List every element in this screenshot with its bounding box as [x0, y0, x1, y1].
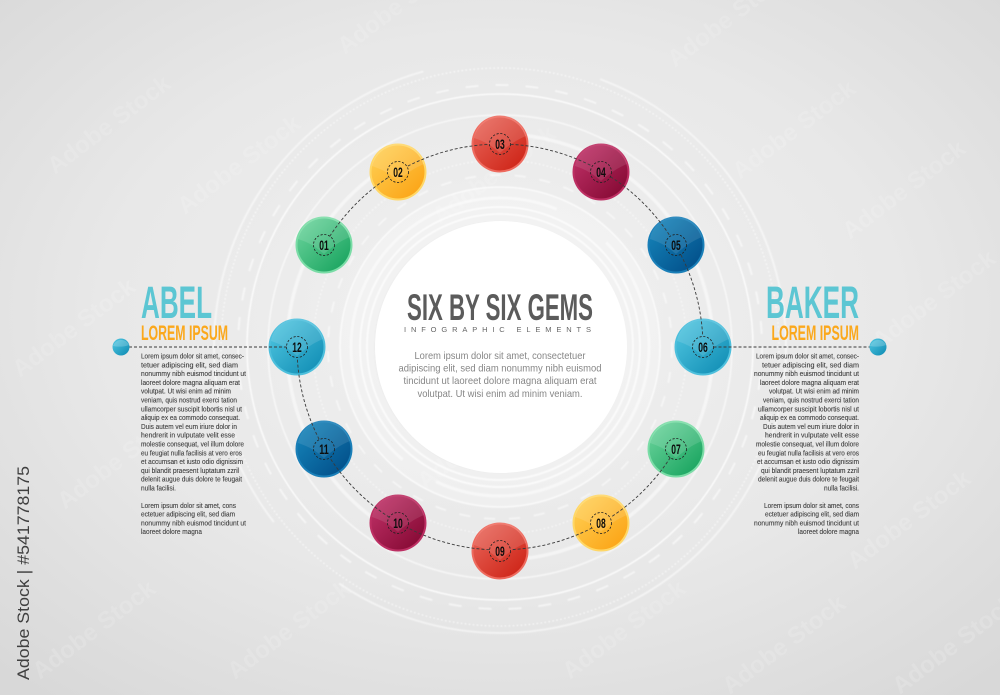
- gem 12 cyan: [268, 318, 326, 376]
- center paragraph: [398, 350, 602, 400]
- stock watermark: Adobe Stock: [27, 575, 161, 685]
- left body text: Lorem ipsum dolor sit amet, consec-: [141, 352, 244, 360]
- stock id side label: Adobe Stock | #541778175: [15, 466, 33, 680]
- stock watermark: Adobe Stock: [412, 385, 546, 495]
- right body text: aliquip ex ea commodo consequat.: [760, 413, 859, 422]
- right body text: nonummy nibh euismod tincidunt ut: [754, 518, 860, 527]
- gem 02 yellow: [370, 144, 426, 200]
- left body text: nulla facilisi.: [141, 484, 176, 492]
- gem 07 green: 07: [671, 442, 681, 457]
- right body text: delenit augue duis dolore te feugait: [758, 475, 860, 484]
- right body text: [754, 352, 860, 536]
- center paragraph: Lorem ipsum dolor sit amet, consectetuer: [414, 350, 586, 362]
- left column: Abel: [141, 277, 247, 536]
- gem 06 cyan: 06: [698, 340, 708, 355]
- gem 04 crimson: 04: [596, 165, 606, 180]
- right body text: eu feugiat nulla facilisis at vero eros: [758, 448, 859, 457]
- gem 01 green: [296, 216, 352, 274]
- gem 05 blue: 05: [671, 238, 681, 253]
- right body text: tetuer adipiscing elit, sed diam: [762, 360, 859, 369]
- left body text: tetuer adipiscing elit, sed diam: [141, 360, 238, 369]
- right body text: laoreet dolore magna aliquam erat: [760, 378, 860, 387]
- left body text: eu feugiat nulla facilisis at vero eros: [141, 448, 242, 457]
- right body text: veniam, quis nostrud exerci tation: [763, 396, 859, 404]
- gem 01 green: 01: [319, 238, 329, 253]
- right body text: ullamcorper suscipit lobortis nisl ut: [758, 404, 860, 413]
- gem 03 red: 03: [495, 137, 505, 152]
- left connector ball: [112, 338, 130, 356]
- right body text: nonummy nibh euismod tincidunt ut: [754, 369, 860, 378]
- subheading: LOREM IPSUM: [772, 322, 859, 345]
- gem 12 cyan: 12: [292, 340, 302, 355]
- dashed connector arcs: [129, 144, 870, 550]
- center paragraph: adipiscing elit, sed diam nonummy nibh euismod: [398, 362, 602, 374]
- gem 03 red: [472, 116, 528, 172]
- right body text: Lorem ipsum dolor sit amet, cons: [764, 501, 859, 510]
- heading Abel: ABEL: [141, 277, 212, 328]
- right body text: volutpat. Ut wisi enim ad minim: [769, 387, 859, 396]
- right body text: nulla facilisi.: [824, 484, 859, 492]
- subheading: LOREM IPSUM: [141, 322, 228, 345]
- stock watermark: Adobe Stock: [727, 75, 861, 185]
- stock watermark: Adobe Stock: [837, 135, 971, 245]
- gem 09 red: [472, 522, 528, 580]
- left body text: veniam, quis nostrud exerci tation: [141, 396, 237, 404]
- gem 04 crimson: [572, 144, 630, 200]
- left body text: nonummy nibh euismod tincidunt ut: [141, 518, 247, 527]
- right body text: molestie consequat, vel illum dolore: [756, 440, 859, 448]
- stock watermark: Adobe Stock: [52, 405, 186, 515]
- main title: SIX BY SIX GEMS: [407, 287, 593, 328]
- right column: Baker: [754, 277, 860, 536]
- gem 02 yellow: 02: [393, 165, 403, 180]
- gem 08 yellow: 08: [596, 516, 606, 531]
- gem 11 blue: 11: [319, 442, 329, 457]
- left body text: laoreet dolore magna: [141, 527, 203, 536]
- stock watermark: Adobe Stock: [557, 575, 691, 685]
- right body text: Duis autem vel eum iriure dolor in: [763, 422, 859, 431]
- gem 10 crimson: 10: [393, 516, 403, 531]
- left body text: hendrerit in vulputate velit esse: [141, 431, 235, 440]
- gem 06 cyan: [674, 318, 732, 376]
- left body text: et accumsan et iusto odio dignissim: [141, 457, 243, 466]
- gem 07 green: [648, 420, 704, 478]
- right body text: hendrerit in vulputate velit esse: [765, 431, 859, 440]
- right connector ball: [870, 338, 886, 356]
- right body text: et accumsan et iusto odio dignissim: [757, 457, 859, 466]
- gem 09 red: 09: [495, 544, 505, 559]
- left body text: ectetuer adipiscing elit, sed diam: [141, 510, 235, 519]
- left body text: [141, 352, 247, 536]
- stock watermark: Adobe Stock: [427, 120, 561, 230]
- stock watermark: Adobe Stock: [867, 245, 1000, 355]
- gem 05 blue: [648, 216, 704, 274]
- left body text: ullamcorper suscipit lobortis nisl ut: [141, 404, 243, 413]
- center white circle: [375, 221, 627, 473]
- gem 08 yellow: [572, 494, 630, 552]
- center title block: [398, 287, 602, 400]
- left body text: delenit augue duis dolore te feugait: [141, 475, 243, 484]
- stock watermark: Adobe Stock: [842, 465, 976, 575]
- left body text: nonummy nibh euismod tincidunt ut: [141, 369, 247, 378]
- left body text: volutpat. Ut wisi enim ad minim: [141, 387, 231, 396]
- left body text: laoreet dolore magna aliquam erat: [141, 378, 241, 387]
- right body text: laoreet dolore magna: [798, 527, 860, 536]
- right body text: qui blandit praesent luptatum zzril: [761, 466, 859, 475]
- heading Baker: BAKER: [766, 277, 859, 328]
- stock watermark: Adobe Stock: [222, 575, 356, 685]
- stock watermark: Adobe Stock: [7, 273, 141, 383]
- gem 11 blue: [296, 420, 352, 478]
- right body text: Lorem ipsum dolor sit amet, consec-: [756, 352, 859, 360]
- left body text: qui blandit praesent luptatum zzril: [141, 466, 239, 475]
- right body text: ectetuer adipiscing elit, sed diam: [765, 510, 859, 519]
- left body text: aliquip ex ea commodo consequat.: [141, 413, 240, 422]
- stock watermark: Adobe Stock: [172, 110, 306, 220]
- left body text: Duis autem vel eum iriure dolor in: [141, 422, 237, 431]
- concentric tech rings: [214, 61, 786, 633]
- center paragraph: volutpat. Ut wisi enim ad minim veniam.: [418, 388, 582, 400]
- left body text: molestie consequat, vel illum dolore: [141, 440, 244, 448]
- center paragraph: tincidunt ut laoreet dolore magna aliquam erat: [404, 375, 597, 387]
- gem 10 crimson: [370, 494, 426, 552]
- left body text: Lorem ipsum dolor sit amet, cons: [141, 501, 236, 510]
- stock watermark: Adobe Stock: [42, 70, 176, 180]
- subtitle: INFOGRAPHIC ELEMENTS: [404, 325, 591, 334]
